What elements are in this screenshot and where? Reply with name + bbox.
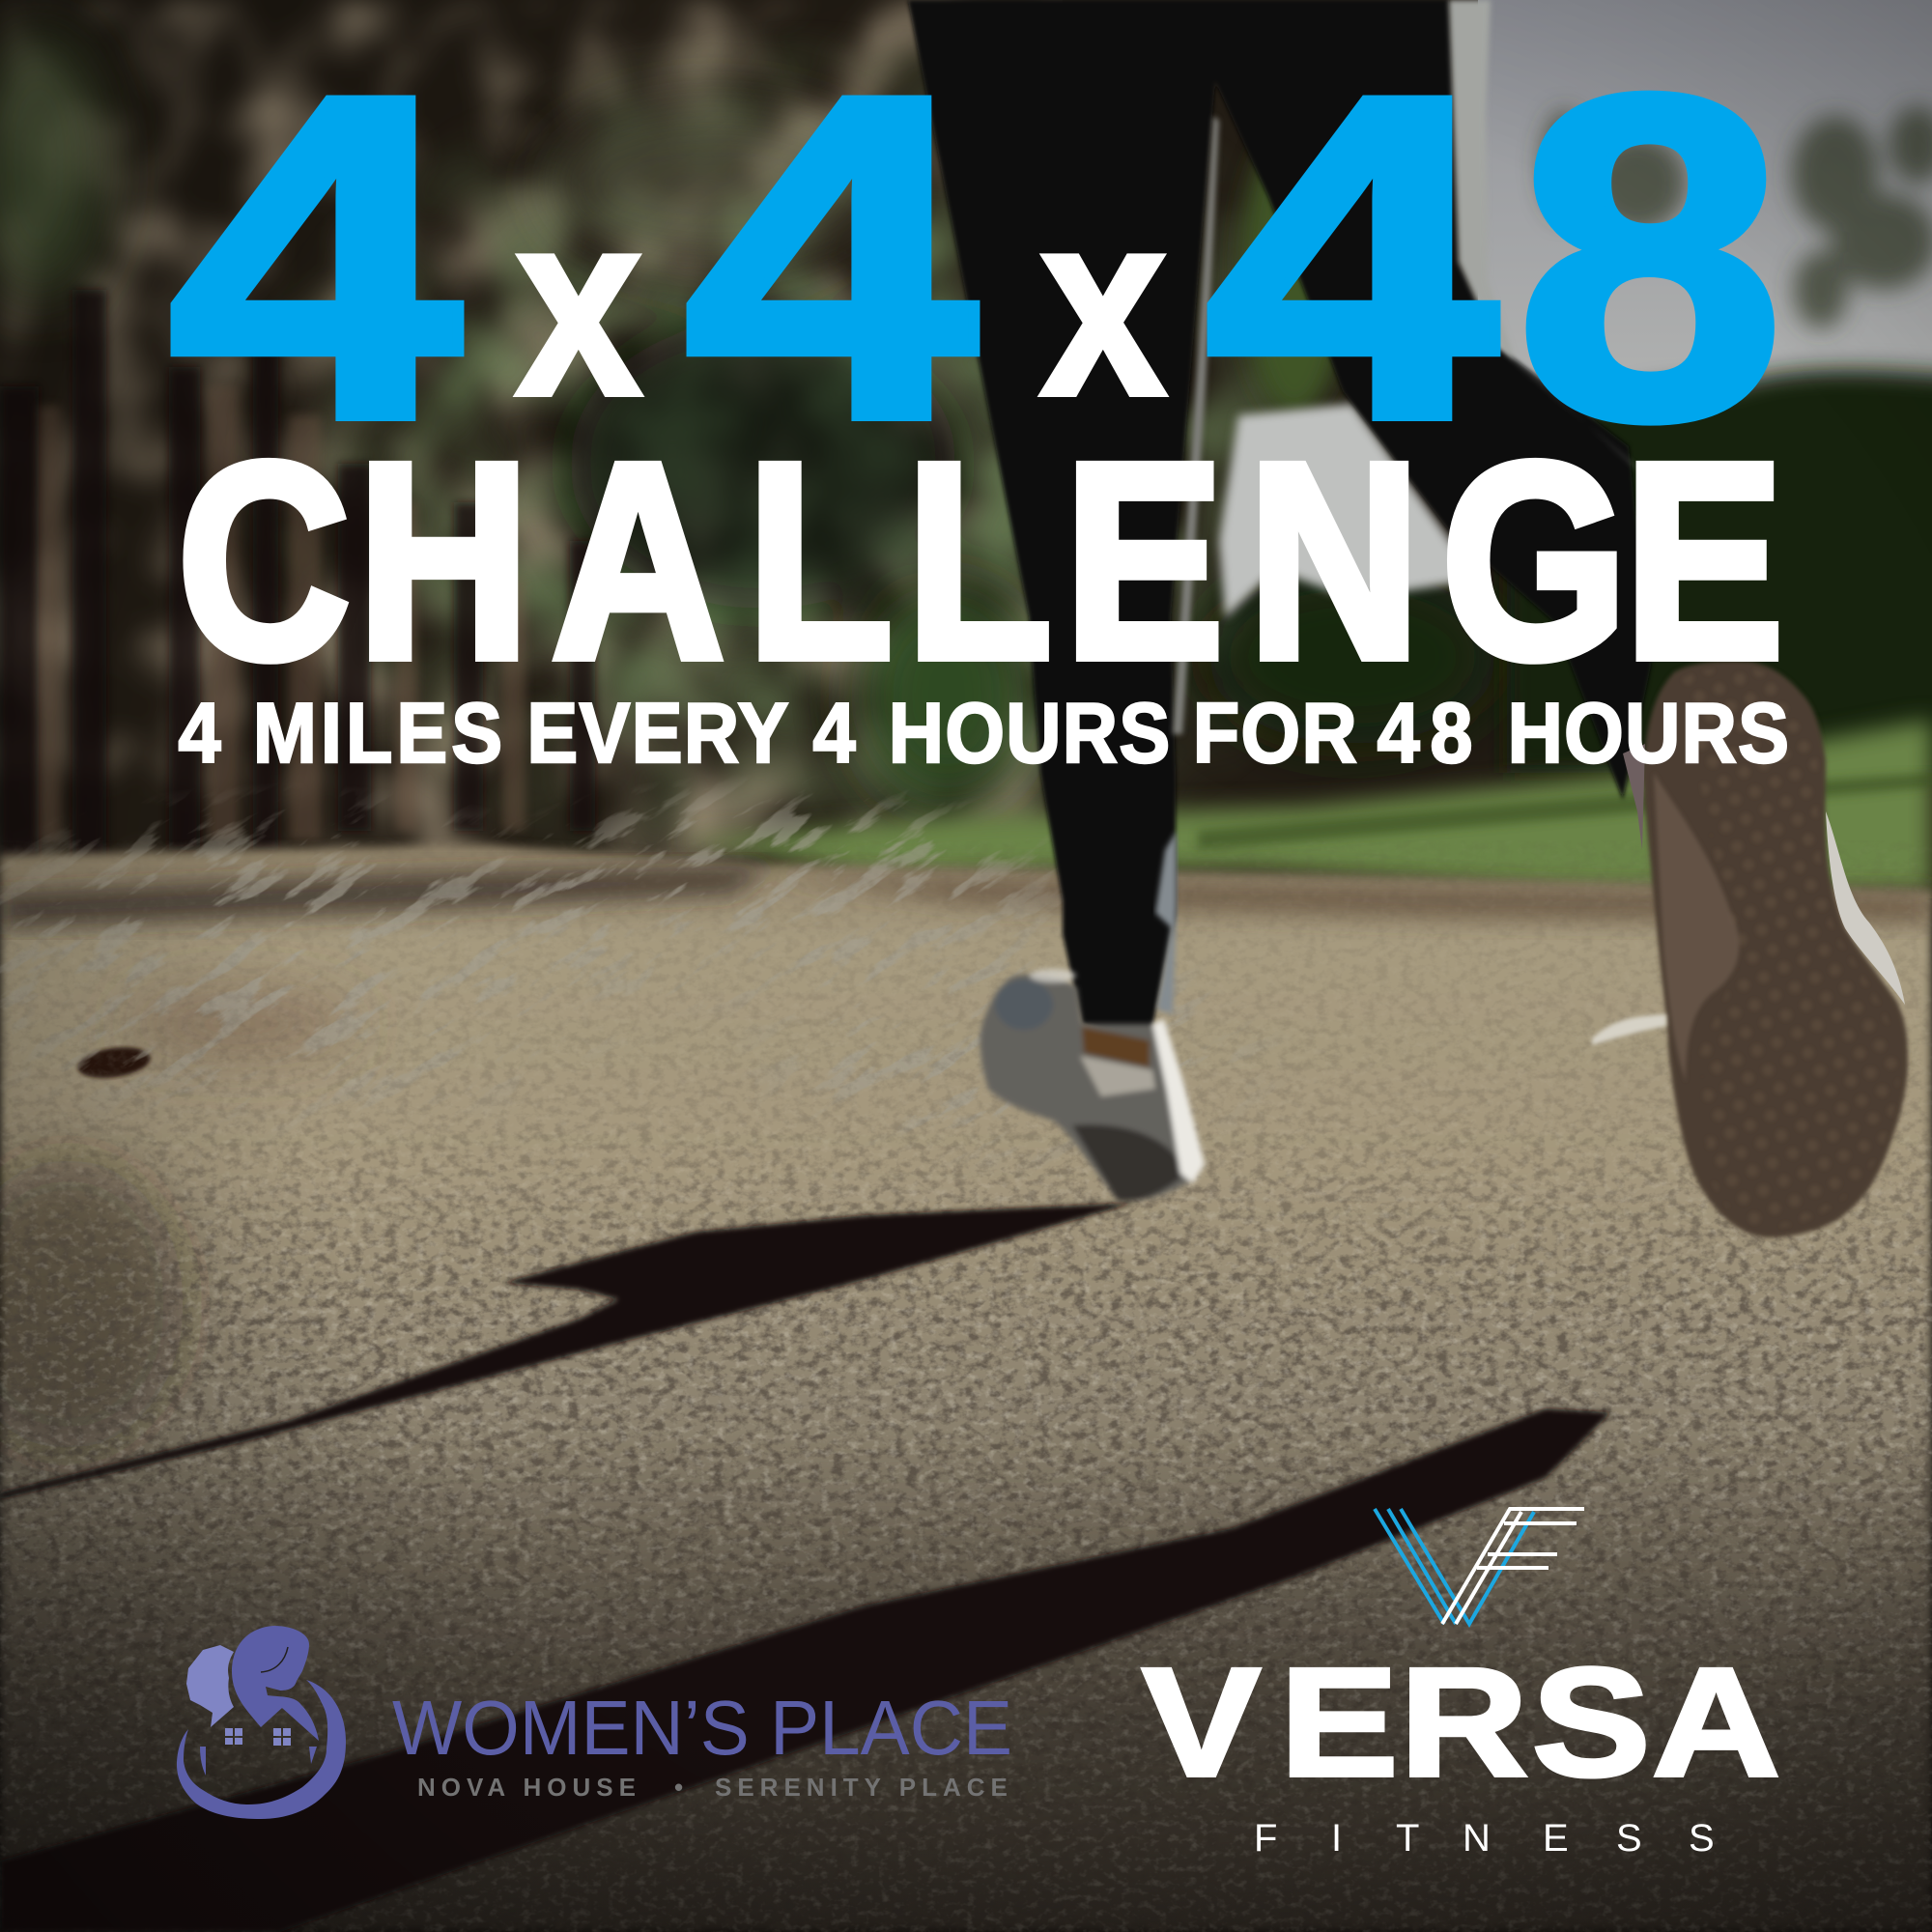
title: 4 x 4 x 48 [168,0,1784,514]
organisation sub-brands: SERENITY PLACE [715,1773,1013,1802]
subtitle: 4 [179,685,244,781]
grunge streaks [0,784,1190,1128]
bright sky gap between legs [1219,404,1478,618]
shadow of runner [0,1408,1611,1932]
numerals 48: 4 [1205,0,1501,514]
white heel strip [1152,1019,1205,1183]
icon: windows [225,1728,291,1746]
ankle [1623,744,1645,850]
numeral 4: 4 [168,0,465,514]
shoe body [980,974,1205,1201]
multiply sign: x [516,157,641,450]
icon: two women and house in ring [177,1626,346,1819]
shoe dark underside [1072,1124,1186,1201]
icon: house walls [200,1747,317,1776]
planted shoe [980,969,1205,1201]
road patches [0,990,357,1449]
road grain [0,840,1932,1932]
grass [676,720,1932,894]
organisation name: WOMEN’S PLACE [392,1685,1012,1771]
tagline: FITNESS [1254,1817,1715,1860]
subtitle: EVERY [526,685,811,781]
white knit upper [1826,811,1905,1005]
sole tread [1681,668,1899,1229]
subtitle: 4 [813,685,879,781]
subtitle: HOURS [889,685,1194,781]
logo: Women's Place [177,1626,1013,1819]
road edge dark band [0,865,1932,927]
midsole side [1654,773,1739,1082]
organisation sub-brands: NOVA HOUSE [417,1773,641,1802]
icon: VF line mark [1375,1509,1584,1624]
multiply sign second: x [1040,157,1166,450]
brown sock [1082,1027,1150,1067]
wordmark: VERSA [1142,1635,1780,1808]
logo: Versa Fitness [1142,1509,1780,1860]
road surface [0,845,1932,1932]
organisation sub-brands: • [674,1773,689,1802]
subtitle: FOR [1193,685,1380,781]
heading: challenge: CHALLENGE [178,405,1784,716]
numerals 48 [1205,0,1784,514]
subtitle: HOURS [1508,685,1790,781]
forest backdrop [0,0,1932,918]
distant trees right [1241,106,1932,773]
lower road darkening [0,1430,1932,1932]
shoe toe sheen [995,980,1053,1030]
white collar [1030,969,1076,982]
raised shoe sole [1623,661,1908,1237]
sky [1478,0,1932,483]
sole base [1642,661,1908,1237]
numeral 4 second: 4 [684,0,980,514]
tree trunks [0,290,595,860]
subtitle: MILES [253,685,531,781]
subtitle: 48 [1378,685,1515,781]
numerals 48: 8 [1516,1,1784,514]
shadow of raised foot [0,1203,1135,1499]
ground highlight [1592,1014,1666,1045]
runner legs [908,0,1651,1040]
stone [75,1043,153,1082]
white sock [1080,1056,1155,1096]
